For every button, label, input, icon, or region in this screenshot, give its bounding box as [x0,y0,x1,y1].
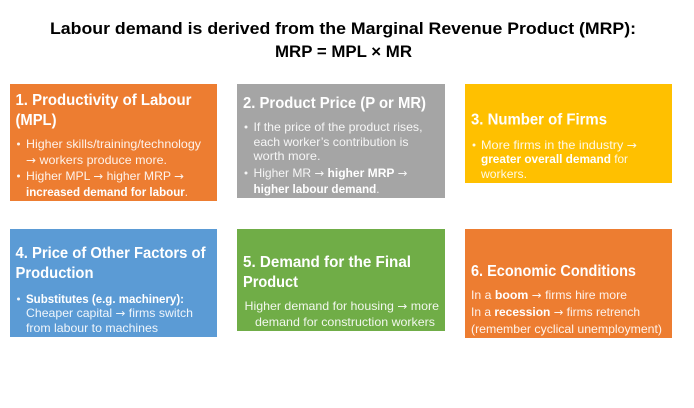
heading: panel 5 [243,254,411,291]
panel: 4. price of other factors [10,229,217,337]
text block: panel 1 bullets: Higher MPL → higher MRP → [26,169,184,183]
title: MRP = MPL × MR [275,42,412,61]
text block: panel 6 body: (remember cyclical unemployment) [471,322,662,336]
title [50,19,636,61]
text block: panel 5 body: Higher demand for housing → more [244,299,439,313]
text block: panel 2 bullets: each worker’s contribution is [254,135,408,149]
heading: panel 4 [16,245,206,282]
heading: panel 4: Production [16,265,94,282]
heading: panel 5: Product [243,274,298,291]
text block: panel 4 bullet: from labour to machines [26,321,158,335]
heading: panel 1: (MPL) [16,112,56,129]
heading: panel 4: 4. Price of Other Factors of [16,245,206,262]
text block: panel 5 body: demand for construction workers [255,315,435,329]
panel: 5. demand for the final product [237,229,445,331]
text block: panel 3 bullet [472,138,637,181]
text block: panel 3 bullet: More firms in the industry → [481,138,637,152]
text block: panel 3 bullet: workers. [480,167,527,181]
text block: panel 2 bullets: higher labour demand. [254,182,380,196]
text block: panel 6 body: In a recession → firms retrench [471,305,640,319]
text block: panel 4 bullet: Cheaper capital → firms switch [26,306,193,320]
text block: panel 2 bullets: Higher MR → higher MRP → [254,166,408,180]
heading: panel 1 [16,92,192,129]
heading: panel 1: 1. Productivity of Labour [16,92,192,109]
panel: 2. product price [237,84,445,198]
text block: panel 3 bullet: greater overall demand for [481,152,628,166]
text block: panel 1 bullets [17,137,201,199]
heading: panel 5: 5. Demand for the Final [243,254,411,271]
heading: panel 2: 2. Product Price (P or MR) [243,95,426,112]
text block: panel 2 bullets [244,120,422,196]
heading: panel 3: 3. Number of Firms [471,112,607,128]
panel: 6. economic conditions [465,229,672,338]
heading: panel 6: 6. Economic Conditions [471,263,636,280]
text block: panel 1 bullets: increased demand for labour. [26,185,188,199]
text block: panel 6 body: In a boom → firms hire more [471,288,627,302]
text block: panel 4 bullet: Substitutes (e.g. machinery): [26,292,184,306]
text block: panel 2 bullets: worth more. [252,149,320,163]
panel: 1. productivity of labour [10,84,217,201]
text block: panel 6 body [471,288,662,336]
title: Labour demand is derived from the Marginal Revenue Product (MRP): [50,19,636,38]
text block: panel 4 bullet [17,292,193,335]
text block: panel 5 body [244,299,439,329]
text block: panel 1 bullets: Higher skills/training/technology [26,137,201,151]
text block: panel 2 bullets: If the price of the product rises, [254,120,422,134]
panel: 3. number of firms [465,84,672,183]
text block: panel 1 bullets: → workers produce more. [26,153,167,167]
